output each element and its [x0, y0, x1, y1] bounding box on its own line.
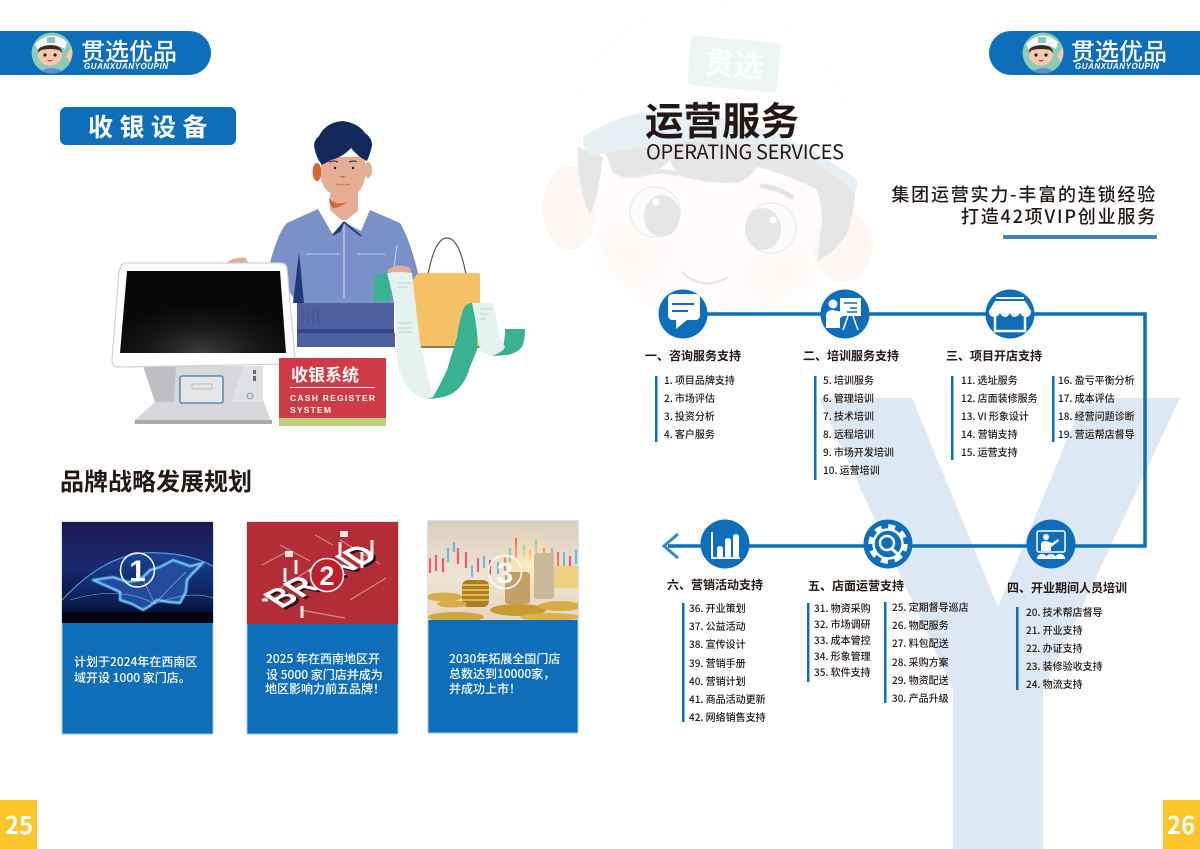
step 5: store operations: [807, 520, 969, 705]
card 2 text: 地区影响力前五品牌！: [265, 680, 385, 697]
sign heading: 收银系统: [291, 361, 359, 386]
card 3 number: 3: [497, 558, 513, 590]
list b: [1052, 372, 1135, 442]
receipt ribbon: [387, 272, 525, 399]
card 2 number: 2: [319, 561, 335, 591]
card 1 text: 域开设 1000 家门店。: [74, 669, 191, 686]
icon: gear with magnifier: [864, 520, 912, 568]
icon: classroom: [1026, 520, 1076, 568]
page number 26: 26: [1167, 806, 1195, 841]
list: 4. 客户服务: [664, 426, 715, 441]
pos terminal: [112, 263, 295, 424]
list: 10. 运营培训: [823, 462, 880, 477]
list b: 26. 物配服务: [892, 617, 949, 632]
section label: 收银设备: [60, 107, 236, 145]
flow line: [668, 314, 1145, 546]
sign: cash register system: SYSTEM: [290, 405, 332, 415]
list: 23. 装修验收支持: [1026, 658, 1103, 673]
list a: 35. 软件支持: [814, 664, 871, 679]
list b: 19. 营运帮店督导: [1058, 426, 1135, 441]
list a: 13. VI 形象设计: [961, 408, 1029, 423]
list: 5. 培训服务: [823, 372, 874, 387]
step 4: opening staff training: [1007, 520, 1127, 691]
illustration: cashier: [112, 121, 525, 426]
watermark: mascot head: 贯选: [702, 37, 766, 87]
list: 39. 营销手册: [689, 655, 746, 670]
card 3 number: [488, 556, 522, 590]
list a: 33. 成本管控: [814, 632, 871, 647]
list a: 34. 形象管理: [814, 648, 871, 663]
icon: bar chart: [700, 520, 750, 568]
tagline: 集团运营实力-丰富的连锁经验: [891, 181, 1157, 207]
card 2 image: [247, 522, 398, 624]
list b: 27. 料包配送: [892, 635, 949, 650]
list a: 32. 市场调研: [814, 616, 871, 631]
tagline: [891, 181, 1157, 239]
icon: trainer at board: [820, 290, 870, 338]
logo subtitle: GUANXUANYOUPIN: [84, 62, 168, 71]
sign english: CASH REGISTER: [290, 393, 375, 403]
list b: 30. 产品升级: [892, 690, 949, 705]
icon: storefront: [986, 290, 1034, 338]
shopping bag: [413, 238, 480, 348]
card 1 number: [120, 553, 154, 588]
title: 运营服务: [645, 91, 799, 147]
card 2 image: BRAND: [256, 539, 387, 614]
logo badge left: [0, 31, 211, 75]
list: 1. 项目品牌支持: [664, 372, 735, 387]
arrow head: [664, 534, 678, 558]
list: 40. 营销计划: [689, 673, 746, 688]
logo wordmark: 贯选优品: [81, 32, 177, 67]
list: 6. 管理培训: [823, 390, 874, 405]
list b: 25. 定期督导巡店: [892, 599, 969, 614]
title: [645, 91, 844, 165]
logo subtitle: GUANXUANYOUPIN: [1075, 62, 1159, 71]
list a: 11. 选址服务: [961, 372, 1018, 387]
list: 36. 开业策划: [689, 600, 746, 615]
mascot avatar: [32, 32, 75, 75]
card 3 image: [426, 521, 582, 622]
list b: 29. 物资配送: [892, 672, 949, 687]
logo badge right: [989, 31, 1200, 75]
card 3 text: 总数达到10000家，: [449, 665, 555, 682]
card 1: [62, 522, 213, 734]
card 1 text: [74, 653, 197, 686]
watermark: letter Y: [819, 398, 1180, 849]
step 2: training: [803, 290, 899, 480]
icon: chat bubble: [658, 290, 708, 338]
heading: 三、项目开店支持: [946, 347, 1042, 364]
card 3 text: 2030年拓展全国门店: [449, 650, 560, 667]
card 2 text: [265, 650, 385, 697]
list: [814, 372, 894, 480]
list: [655, 372, 735, 442]
list a: [951, 372, 1038, 460]
list: 41. 商品活动更新: [689, 691, 766, 706]
watermark: mascot head: [543, 3, 873, 321]
card 1 text: 计划于2024年在西南区: [74, 653, 197, 670]
card 3: [426, 521, 582, 733]
list b: 16. 盈亏平衡分析: [1058, 372, 1135, 387]
card 2: [247, 522, 398, 734]
list b: [884, 599, 969, 705]
list: 37. 公益活动: [689, 618, 746, 633]
section label: 收银设备: 收银设备: [88, 108, 214, 144]
card 3 text: [449, 650, 560, 697]
card 2 image: BRAND: [258, 541, 390, 616]
list b: 18. 经营问题诊断: [1058, 408, 1135, 423]
list b: 17. 成本评估: [1058, 390, 1115, 405]
heading: 五、店面运营支持: [808, 577, 904, 594]
step 1: consulting: [645, 290, 741, 442]
logo wordmark: 贯选优品: [1071, 32, 1167, 67]
list: 8. 远程培训: [823, 426, 874, 441]
heading: 二、培训服务支持: [803, 347, 899, 364]
list: [682, 600, 766, 724]
man: [226, 121, 418, 303]
list: 38. 宣传设计: [689, 636, 746, 651]
sign: cash register system: [279, 358, 386, 426]
step 6: marketing: [667, 520, 766, 724]
page number 26: [1163, 800, 1200, 849]
list: 21. 开业支持: [1026, 622, 1083, 637]
step 3: store opening: [946, 290, 1135, 460]
mascot avatar: [1022, 32, 1066, 75]
cash register: [297, 303, 395, 347]
list: 24. 物流支持: [1026, 676, 1083, 691]
english subtitle: OPERATING SERVICES: [646, 136, 844, 165]
card 1 image: [62, 522, 213, 624]
list b: 28. 采购方案: [892, 654, 949, 669]
list: 9. 市场开发培训: [823, 444, 894, 459]
card 2 text: 设 5000 家门店并成为: [266, 666, 383, 683]
card 2 text: 2025 年在西南地区开: [266, 650, 380, 667]
list a: [807, 600, 871, 682]
heading: 一、咨询服务支持: [645, 347, 741, 364]
page number 25: 25: [5, 806, 33, 841]
card 3 text: 并成功上市！: [449, 680, 521, 697]
list a: 12. 店面装修服务: [961, 390, 1038, 405]
list a: 31. 物资采购: [814, 600, 871, 615]
heading: 六、营销活动支持: [667, 576, 763, 593]
heading: 四、开业期间人员培训: [1007, 579, 1127, 596]
list: 20. 技术帮店督导: [1026, 604, 1103, 619]
list: 22. 办证支持: [1026, 640, 1083, 655]
heading: brand strategy: 品牌战略发展规划: [60, 462, 252, 497]
list a: 14. 营销支持: [961, 426, 1018, 441]
card 2 number: [310, 558, 344, 592]
list a: 15. 运营支持: [961, 444, 1018, 459]
card 1 number: 1: [129, 555, 146, 588]
list: 7. 技术培训: [823, 408, 874, 423]
list: 42. 网络销售支持: [689, 709, 766, 724]
list: [1016, 604, 1103, 691]
list: 3. 投资分析: [664, 408, 715, 423]
list: 2. 市场评估: [664, 390, 715, 405]
tagline: 打造42项VIP创业服务: [961, 203, 1157, 229]
page number 25: [0, 800, 37, 849]
